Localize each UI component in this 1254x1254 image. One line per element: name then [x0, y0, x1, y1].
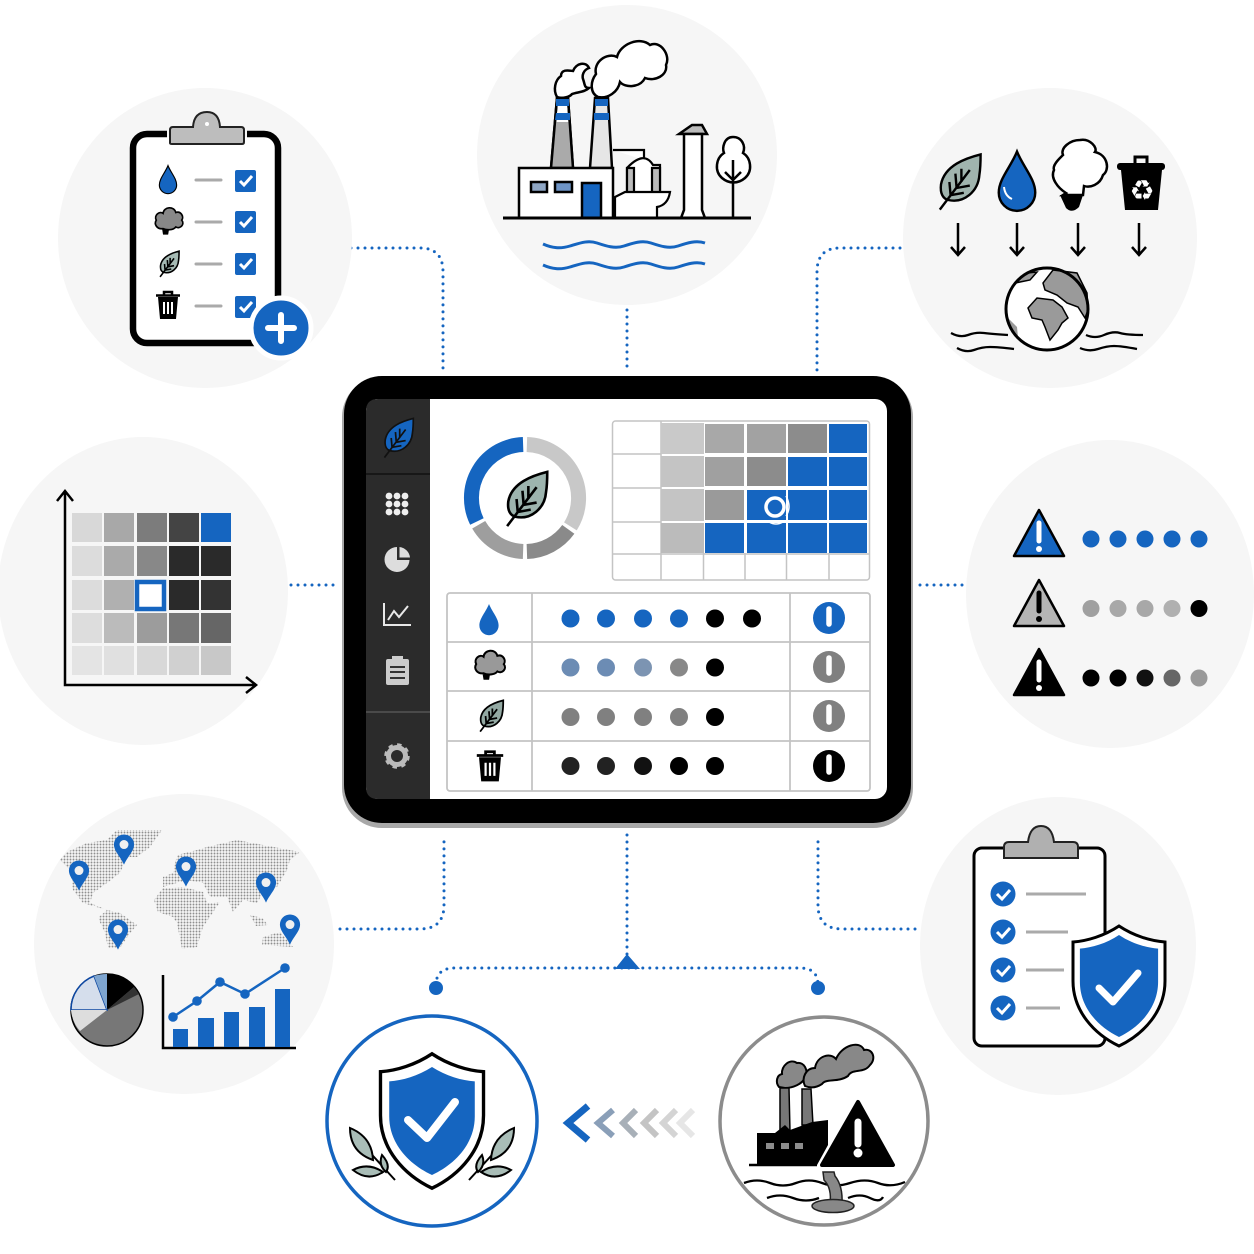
panel: heat matrix — [0, 437, 288, 745]
donut chart — [471, 444, 579, 552]
matrix cells — [72, 513, 231, 675]
icon: cloud row — [155, 208, 256, 235]
panel: compliance checklist — [920, 797, 1196, 1095]
icon: warning triangle — [822, 1102, 893, 1165]
icon: drop row — [159, 166, 256, 194]
icon: tree — [717, 137, 750, 218]
arrows: chevrons — [568, 1106, 693, 1140]
icon: factory — [749, 1045, 873, 1165]
icon: leaf row — [160, 251, 256, 277]
icon: leaf — [940, 154, 981, 210]
panel: global map and charts — [34, 794, 334, 1094]
icon: chimneys — [551, 98, 612, 168]
icon: leaves — [350, 1128, 514, 1180]
icon: shield — [1073, 926, 1165, 1046]
connector lines — [291, 248, 965, 995]
panel: clipboard add — [58, 88, 352, 388]
icon: cloud — [1053, 140, 1107, 211]
icon: tower — [679, 125, 707, 218]
panel: factory — [477, 5, 777, 305]
alert row blue — [1014, 510, 1208, 556]
icon: outflow — [812, 1172, 854, 1212]
panel: pollution risk — [720, 1017, 928, 1225]
icon: recycle bin — [1117, 157, 1165, 210]
row: biodiversity — [480, 700, 845, 732]
waves — [744, 1180, 905, 1200]
icon: clipboard — [386, 656, 409, 685]
sidebar — [366, 399, 430, 799]
row: water — [479, 602, 845, 635]
icon: smoke — [555, 41, 667, 98]
panel: environmental inputs to earth — [903, 88, 1197, 388]
alert row black — [1014, 649, 1208, 695]
axes — [57, 491, 256, 693]
row: air — [475, 651, 845, 683]
icon: water waves — [543, 242, 705, 269]
icon: trash row — [156, 292, 256, 319]
checklist items — [990, 882, 1086, 1020]
icon: drop — [999, 152, 1035, 211]
icon: pie — [385, 547, 410, 572]
icon: building — [519, 168, 613, 218]
icon: shield — [380, 1054, 484, 1188]
world map — [60, 830, 300, 949]
icon: plus badge — [251, 298, 311, 358]
icon: leaf — [384, 418, 413, 458]
icon: grid — [386, 493, 408, 515]
map pins — [69, 834, 300, 950]
icon: line chart — [384, 603, 411, 625]
icon: globe — [1006, 268, 1088, 350]
impact table — [447, 593, 870, 791]
icon: recycle bin: ♻ — [1129, 174, 1155, 207]
icon: gear — [386, 745, 408, 767]
alert row grey — [1014, 580, 1208, 626]
pie chart — [71, 974, 143, 1046]
bar and line chart — [163, 963, 296, 1048]
waves — [951, 332, 1143, 351]
row: waste — [477, 750, 845, 782]
tablet dashboard — [342, 376, 913, 828]
arrows down — [951, 223, 1146, 255]
heat grid — [612, 421, 870, 580]
panel: risk alerts — [966, 440, 1254, 748]
icon: tanks — [613, 150, 670, 218]
panel: protected outcome — [327, 1016, 537, 1226]
